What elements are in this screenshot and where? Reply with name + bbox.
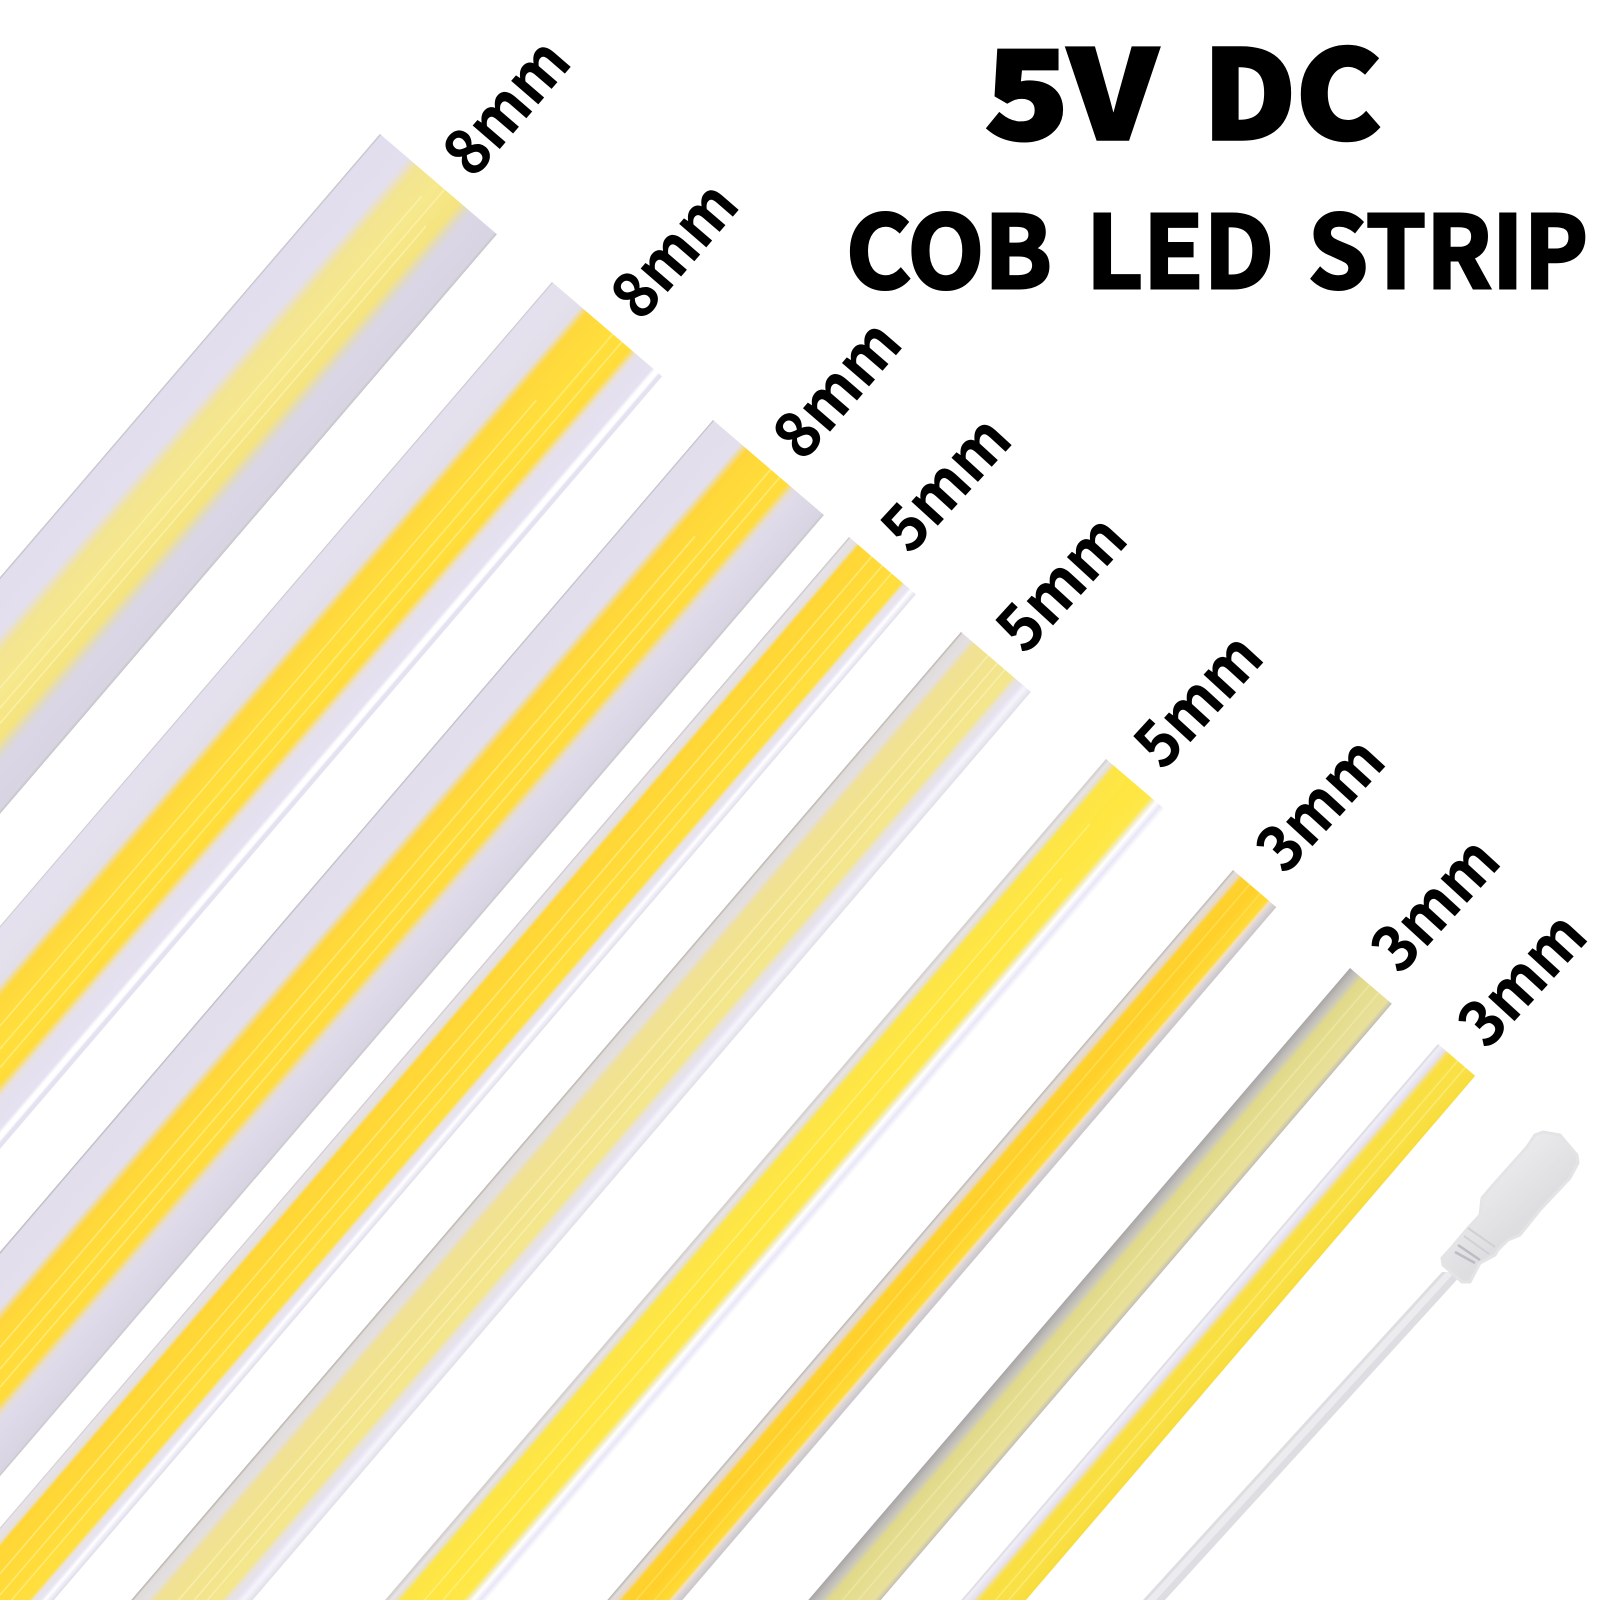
title bbox=[846, 0, 1588, 317]
label: 3mm: 3mm bbox=[1231, 714, 1402, 889]
strip 2: 8mm yellow bbox=[0, 282, 662, 1149]
strip 9: 3mm yellow bbox=[961, 1044, 1475, 1600]
heading: COB LED STRIP: LED bbox=[1086, 172, 1274, 317]
cable bbox=[1143, 1272, 1464, 1600]
size labels bbox=[418, 16, 1600, 1064]
heading: 5V DC: 5V bbox=[985, 0, 1159, 175]
label: 3mm: 3mm bbox=[1346, 814, 1517, 989]
heading: COB LED STRIP bbox=[846, 172, 1588, 317]
strip 4: 5mm yellow bbox=[0, 537, 916, 1600]
strip 1: 8mm pale warm bbox=[0, 134, 497, 814]
heading: COB LED STRIP: COB bbox=[846, 172, 1052, 317]
label: 5mm: 5mm bbox=[1109, 610, 1280, 785]
strip 7: 3mm amber bbox=[607, 870, 1276, 1600]
heading: COB LED STRIP: STRIP bbox=[1308, 172, 1588, 317]
heading: 5V DC bbox=[985, 0, 1381, 175]
heading: 5V DC: DC bbox=[1203, 0, 1381, 175]
power cable with DC connector bbox=[1143, 1132, 1578, 1600]
strip 8: 3mm pale bbox=[808, 968, 1392, 1600]
strip 6: 5mm bright yellow bbox=[385, 759, 1164, 1600]
strip 3: 8mm yellow bbox=[0, 420, 824, 1476]
label: 5mm: 5mm bbox=[971, 492, 1144, 669]
label: 8mm: 8mm bbox=[418, 16, 588, 192]
label: 8mm: 8mm bbox=[586, 159, 756, 335]
label: 8mm: 8mm bbox=[748, 297, 919, 475]
strip 5: 5mm pale warm bbox=[131, 632, 1031, 1600]
label: 5mm: 5mm bbox=[856, 392, 1029, 569]
DC female connector bbox=[1442, 1132, 1578, 1282]
